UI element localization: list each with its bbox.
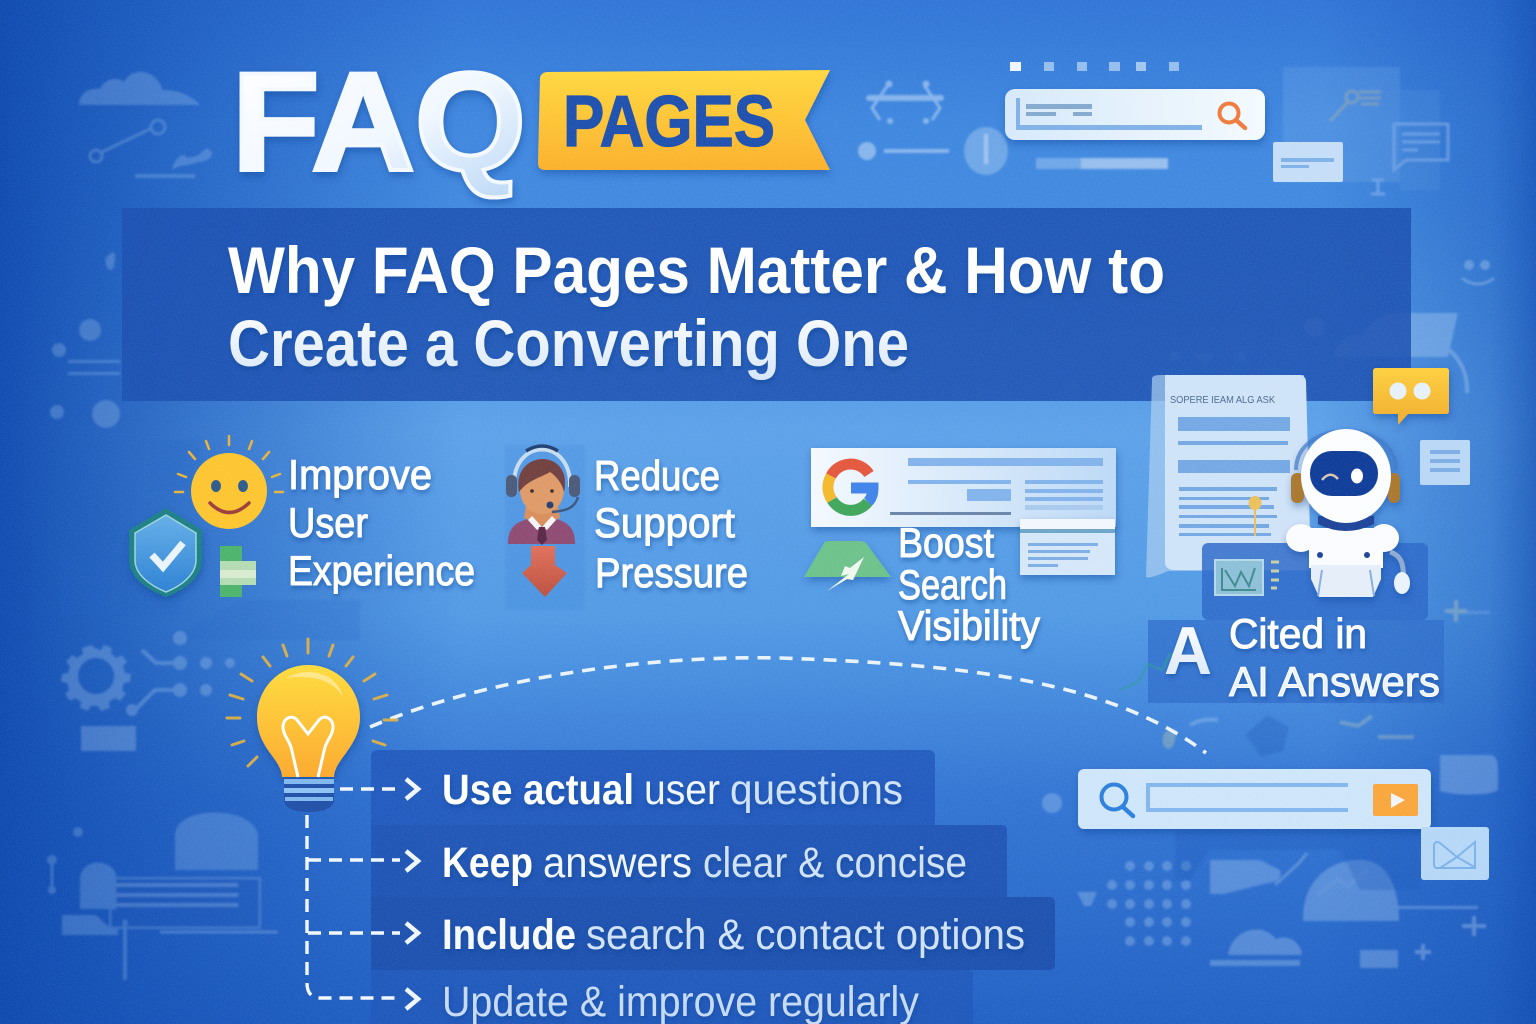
tip 1: user: [644, 766, 720, 814]
faint background icons: network and gear top centre: [858, 80, 1168, 175]
label: Improve: [288, 451, 432, 498]
label: User: [288, 499, 368, 546]
faint background icons: lower right: [1042, 715, 1498, 968]
google results card: [811, 448, 1116, 527]
benefit: cited in AI answers: [1120, 368, 1470, 705]
icon: light bulb: [227, 639, 397, 812]
chat bubble yellow: [1373, 368, 1449, 425]
panel behind label: [1148, 620, 1444, 703]
icon: green plus: [220, 546, 256, 597]
label: [898, 519, 1040, 649]
icon: smiley: [175, 436, 283, 529]
faint background icons: lower left gear network: [61, 631, 235, 751]
icon: down arrow: [522, 546, 567, 597]
faint background icons: top left: [50, 72, 212, 428]
tip 2: Keep: [442, 839, 533, 887]
icon: robot: [1286, 429, 1410, 597]
banner: PAGES: PAGES: [563, 82, 775, 162]
row of small squares: [1010, 62, 1179, 71]
teal squiggle behind letter A: [1120, 654, 1182, 690]
headline band: [122, 208, 1411, 401]
tip 3: Include: [442, 911, 576, 959]
small results card: [1020, 519, 1115, 575]
faint background icons: lower left panel chart: [47, 812, 278, 980]
label: Search: [898, 561, 1007, 608]
label: [1229, 610, 1440, 705]
label: Support: [594, 499, 735, 546]
label: Boost: [898, 519, 994, 566]
search bar bottom: [1078, 769, 1431, 829]
label: [288, 451, 475, 594]
search bar top: [1005, 89, 1265, 140]
dark area under search bar: [1175, 830, 1420, 890]
document: [1146, 375, 1311, 577]
faint background icons: left middle: [60, 440, 360, 640]
icon: shield: [129, 508, 202, 597]
headline: Create a Converting One: [228, 306, 909, 380]
banner: PAGES: [538, 70, 830, 170]
tip 1: questions: [730, 766, 903, 814]
tip 2: clear & concise: [703, 839, 967, 887]
icon: google G: [828, 464, 873, 510]
icon: green lightning mountain: [804, 541, 891, 591]
label: Pressure: [595, 549, 748, 596]
title: FAQ: FAQ: [232, 43, 526, 200]
icon: small chart: [1215, 560, 1279, 595]
dashed curve to search: [370, 658, 1206, 753]
small note card top right: [1273, 142, 1343, 182]
headline: [228, 233, 1165, 380]
benefit: reduce support pressure: [505, 445, 748, 610]
faint background icons: top right: [1283, 67, 1448, 194]
label: Experience: [288, 547, 475, 594]
headline: Why FAQ Pages Matter & How to: [228, 233, 1165, 307]
icon: mail: [1421, 827, 1489, 880]
tip 1: Use actual: [442, 766, 634, 814]
tip 1: [442, 766, 903, 814]
dashed connectors and arrows: [307, 779, 418, 1009]
label: Cited in: [1229, 610, 1367, 657]
faint background icons: mid right: [1170, 260, 1494, 622]
label: Reduce: [594, 452, 720, 499]
icon: support agent: [506, 446, 580, 545]
document: SOPERE IEAM ALG ASK: [1170, 395, 1275, 406]
label: Visibility: [898, 602, 1040, 649]
decorative letter A: A: [1164, 613, 1212, 689]
panel behind robot: [1202, 543, 1428, 620]
benefit: improve user experience: [129, 436, 475, 597]
tip 2: [442, 839, 967, 887]
small doc icon: [1420, 440, 1470, 485]
label: [594, 452, 748, 596]
tip 3: search & contact options: [586, 911, 1025, 959]
tips panels: [371, 750, 1055, 1024]
benefit: boost search visibility: [804, 448, 1116, 649]
label: AI Answers: [1229, 658, 1440, 705]
tip 2: answers: [543, 839, 692, 887]
